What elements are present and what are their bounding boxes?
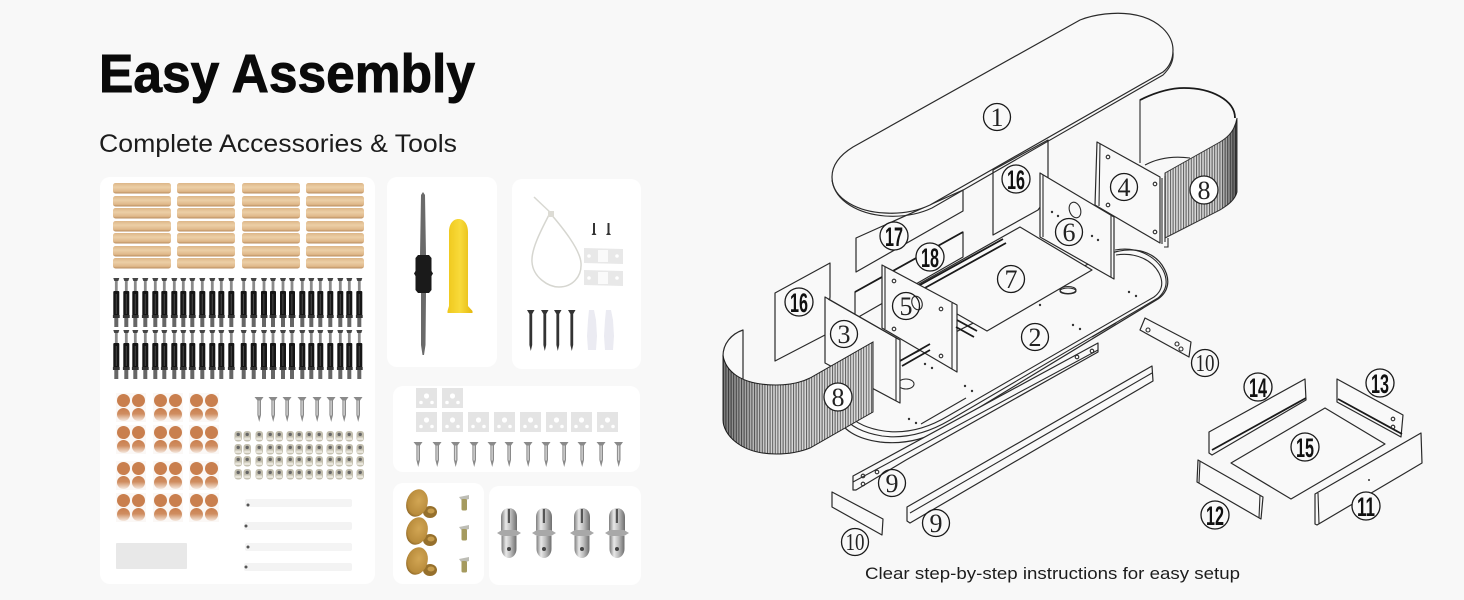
icon: gold knobs xyxy=(403,486,437,578)
icon: shelf pins xyxy=(497,508,629,558)
icon: yellow plug xyxy=(448,219,472,313)
felt pads xyxy=(116,393,219,522)
part 16: rear back panel xyxy=(993,140,1048,235)
label 17: 17 xyxy=(885,222,903,252)
panel: cable tie and wall anchors xyxy=(512,179,641,369)
label 9: 9 xyxy=(886,469,898,498)
icon: two-way screwdriver xyxy=(414,192,433,355)
icon: long black screws xyxy=(527,310,576,351)
label 9: 9 xyxy=(930,509,942,538)
label 9 xyxy=(922,509,950,538)
part 3: end panel xyxy=(825,297,900,403)
silver screws xyxy=(254,397,362,422)
part 7: shelf xyxy=(919,227,1092,331)
panel: dowels, cam fittings, felt pads, hardware xyxy=(100,177,375,584)
part 1: table top xyxy=(832,13,1173,216)
label 16: 16 xyxy=(790,288,808,318)
label 15 xyxy=(1291,433,1319,463)
panel: plates and screws xyxy=(393,386,640,472)
screws xyxy=(414,442,623,467)
panel: gold knobs xyxy=(393,483,484,584)
part 10: left end rail xyxy=(832,492,883,556)
label 6: 6 xyxy=(1062,218,1076,247)
label 4: 4 xyxy=(1118,173,1130,202)
part 8: left ribbed door xyxy=(723,330,873,454)
part 18: back panel xyxy=(855,232,963,319)
label 14: 14 xyxy=(1249,373,1267,403)
cam fittings xyxy=(113,278,363,379)
part 5: divider xyxy=(882,265,977,372)
label 8 xyxy=(1190,176,1218,205)
part 9: upper rail xyxy=(853,343,1098,498)
part 15: drawer bottom xyxy=(1231,408,1385,499)
label 8: 8 xyxy=(832,383,844,412)
part 9: lower rail xyxy=(907,366,1153,538)
label 1 xyxy=(984,103,1010,132)
label 2 xyxy=(1022,323,1048,352)
part 13: drawer side xyxy=(1337,369,1403,437)
part 4: end panel xyxy=(1095,142,1168,247)
icon: small black screws xyxy=(592,223,611,235)
label 2: 2 xyxy=(1028,323,1042,352)
part 6: divider xyxy=(1040,173,1114,279)
panel: shelf pins xyxy=(489,486,641,585)
title: Easy Assembly xyxy=(99,44,475,104)
icon: cable tie xyxy=(532,197,581,287)
icon: knob screws xyxy=(459,495,469,572)
part 11: drawer front xyxy=(1315,433,1422,525)
caption: Clear step-by-step instructions for easy setup xyxy=(865,564,1240,583)
subtitle: Complete Accessories & Tools xyxy=(99,130,457,158)
part 8: right ribbed door xyxy=(1140,88,1237,238)
label 16: 16 xyxy=(1007,165,1025,195)
icon: mounting plates xyxy=(584,248,623,286)
wooden dowels xyxy=(113,183,364,268)
part 17: back panel xyxy=(856,190,963,272)
plastic corner plates xyxy=(416,388,618,432)
label 5: 5 xyxy=(900,292,912,321)
label 15: 15 xyxy=(1296,433,1314,463)
label 8: 8 xyxy=(1198,176,1210,205)
part 10: right end rail xyxy=(1140,318,1218,377)
label 10: 10 xyxy=(846,530,864,556)
part 12: drawer side xyxy=(1197,460,1263,531)
label 13: 13 xyxy=(1371,369,1389,399)
exploded assembly diagram xyxy=(723,13,1422,556)
label 18: 18 xyxy=(921,243,939,273)
label 3: 3 xyxy=(838,320,850,349)
cam nuts xyxy=(234,431,364,480)
panel: screwdriver and drill stop xyxy=(387,177,497,367)
label 7 xyxy=(998,265,1024,294)
part 2: base board xyxy=(835,249,1168,443)
icon: wall anchors xyxy=(587,310,614,350)
label 9 xyxy=(878,469,906,498)
drawer runners xyxy=(244,499,352,571)
part 16: front back panel xyxy=(775,263,830,361)
grey foam pad xyxy=(116,543,187,569)
part 14: drawer back xyxy=(1209,373,1306,455)
label 8 xyxy=(824,383,852,412)
label 12: 12 xyxy=(1206,501,1224,531)
label 1: 1 xyxy=(990,103,1004,132)
label 10: 10 xyxy=(1196,351,1214,377)
label 7: 7 xyxy=(1004,265,1018,294)
label 11: 11 xyxy=(1357,492,1375,522)
